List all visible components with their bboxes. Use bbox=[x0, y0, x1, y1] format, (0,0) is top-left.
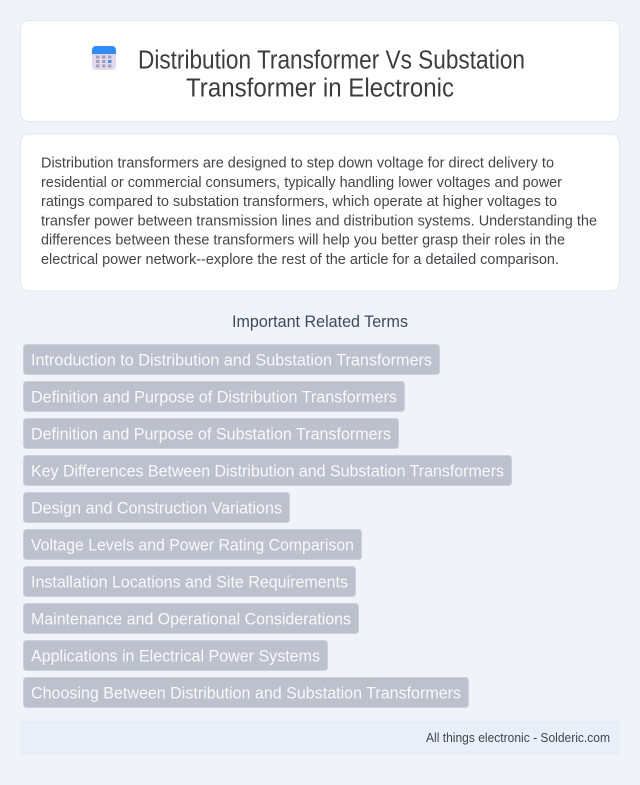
tag: key differences: Key Differences Between Distribution and Substation Transformers bbox=[31, 462, 504, 480]
footer: All things electronic - Solderic.com bbox=[426, 731, 610, 745]
text block: summary paragraph: differences between these transformers will help you better grasp their roles in the bbox=[41, 232, 565, 249]
tag: distribution definition: Definition and Purpose of Distribution Transformers bbox=[31, 388, 397, 406]
tag: maintenance bbox=[24, 604, 358, 634]
text block: summary paragraph: residential or commercial consumers, typically handling lower voltages and power bbox=[41, 174, 562, 191]
title: Transformer in Electronic bbox=[186, 74, 454, 102]
tag: substation definition: Definition and Purpose of Substation Transformers bbox=[31, 424, 391, 444]
text block: summary paragraph: electrical power network--explore the rest of the article for a detailed comparison. bbox=[41, 251, 559, 268]
tag: choosing bbox=[24, 678, 468, 708]
tag: substation definition bbox=[24, 418, 398, 448]
text block: summary paragraph: Distribution transformers are designed to step down voltage for direct delivery to bbox=[41, 154, 554, 172]
tag: applications: Applications in Electrical Power Systems bbox=[31, 646, 320, 666]
tag: design: Design and Construction Variations bbox=[31, 498, 282, 518]
tag: installation: Installation Locations and Site Requirements bbox=[31, 572, 348, 592]
tag: introduction bbox=[24, 344, 440, 374]
title bbox=[138, 46, 525, 102]
tag: voltage: Voltage Levels and Power Rating Comparison bbox=[31, 536, 354, 554]
text block: summary paragraph: ratings compared to substation transformers, which operate at higher voltages to bbox=[41, 193, 557, 210]
tag: maintenance: Maintenance and Operational Considerations bbox=[31, 610, 351, 628]
tag: distribution definition bbox=[24, 382, 404, 412]
tag: voltage bbox=[24, 530, 362, 560]
heading: important related terms: Important Related Terms bbox=[232, 313, 408, 331]
title: Distribution Transformer Vs Substation bbox=[138, 46, 525, 74]
tag: introduction: Introduction to Distribution and Substation Transformers bbox=[31, 350, 432, 370]
text block: summary paragraph bbox=[41, 154, 597, 268]
tag: key differences bbox=[24, 456, 512, 486]
tag: choosing: Choosing Between Distribution and Substation Transformers bbox=[31, 684, 461, 702]
list of related term tags bbox=[24, 344, 512, 708]
footer bbox=[20, 721, 620, 755]
panel: summary text bbox=[20, 134, 620, 291]
tag: installation bbox=[24, 566, 356, 596]
icon: calendar bbox=[92, 46, 116, 70]
tag: applications bbox=[24, 640, 328, 670]
text block: summary paragraph: transfer power between transmission lines and distribution systems. Understanding the bbox=[41, 212, 597, 229]
panel: title card bbox=[20, 20, 620, 122]
tag: design bbox=[24, 492, 290, 522]
